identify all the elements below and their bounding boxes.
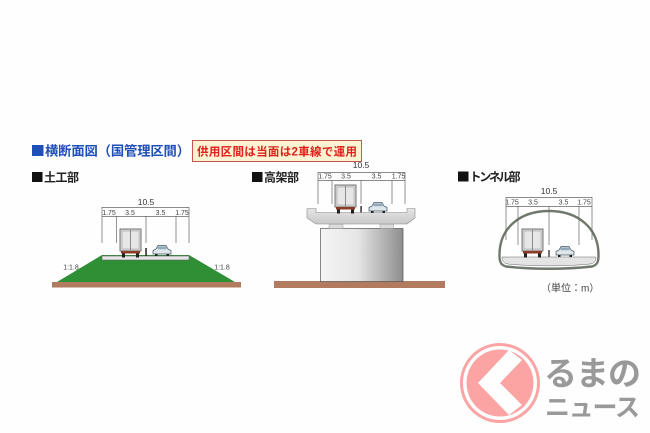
- dimension labels: 10.5: [138, 197, 155, 207]
- heading: earthwork section: [32, 170, 79, 184]
- dimension lines: [102, 207, 189, 243]
- deck: [307, 208, 415, 224]
- dimension labels: [318, 160, 405, 180]
- dimension labels: 10.5: [541, 186, 558, 196]
- logo: kuruma no news watermark: ニュース: [545, 394, 640, 422]
- dimension labels: 1.75: [505, 200, 519, 206]
- truck: [120, 229, 141, 258]
- dimension lines: [318, 172, 405, 204]
- truck: [335, 185, 356, 214]
- callout: 2 lane operation note: 供用区間は当面は2車線で運用: [197, 144, 357, 158]
- road surface: [502, 257, 596, 266]
- unit note: （単位：m）: [541, 282, 599, 294]
- dimension lines: [506, 197, 592, 245]
- diagram: earthwork cross-section: [52, 197, 241, 288]
- dimension labels: 3.5: [372, 174, 381, 180]
- median post: [360, 206, 362, 212]
- dimension labels: 10.5: [353, 160, 370, 170]
- ground strip: [274, 281, 445, 288]
- slope labels: 1:1.8: [63, 264, 79, 272]
- car: [556, 246, 574, 257]
- dimension labels: [102, 197, 189, 217]
- slope labels: 1:1.8: [214, 264, 230, 272]
- dimension labels: 1.75: [102, 210, 116, 217]
- logo mark: [462, 344, 538, 422]
- dimension labels: 1.75: [577, 200, 591, 206]
- dimension labels: 3.5: [125, 210, 135, 217]
- callout: 2 lane operation note: [192, 140, 362, 162]
- dimension labels: 1.75: [318, 174, 332, 180]
- slope labels: [63, 264, 230, 272]
- diagram: viaduct cross-section: [274, 160, 445, 288]
- heading: viaduct section: [252, 170, 299, 184]
- embankment: [57, 255, 235, 282]
- dimension labels: 3.5: [528, 200, 538, 206]
- ground strip: [52, 282, 241, 288]
- pier: [320, 228, 403, 282]
- logo text: るまの: [544, 355, 641, 392]
- dimension labels: 1.75: [392, 174, 405, 180]
- dimension labels: 3.5: [341, 174, 351, 180]
- dimension labels: 3.5: [156, 210, 165, 217]
- diagram: tunnel cross-section: [499, 186, 599, 269]
- bearings: [329, 224, 394, 228]
- heading: viaduct section: 高架部: [264, 170, 299, 184]
- median post: [145, 248, 147, 256]
- logo: kuruma no news watermark: [462, 344, 641, 422]
- title: 横断面図（国管理区間）: [45, 142, 190, 158]
- dimension labels: 1.75: [175, 210, 189, 217]
- road slab: [102, 256, 189, 260]
- dimension labels: 3.5: [559, 200, 568, 206]
- tunnel lining: [499, 211, 599, 269]
- car: [153, 246, 171, 256]
- heading: earthwork section: 土工部: [44, 170, 79, 184]
- median post: [548, 250, 550, 257]
- dimension labels: [505, 186, 591, 206]
- truck: [522, 229, 543, 258]
- heading: tunnel section: トンネル部: [470, 169, 520, 184]
- car: [369, 202, 387, 213]
